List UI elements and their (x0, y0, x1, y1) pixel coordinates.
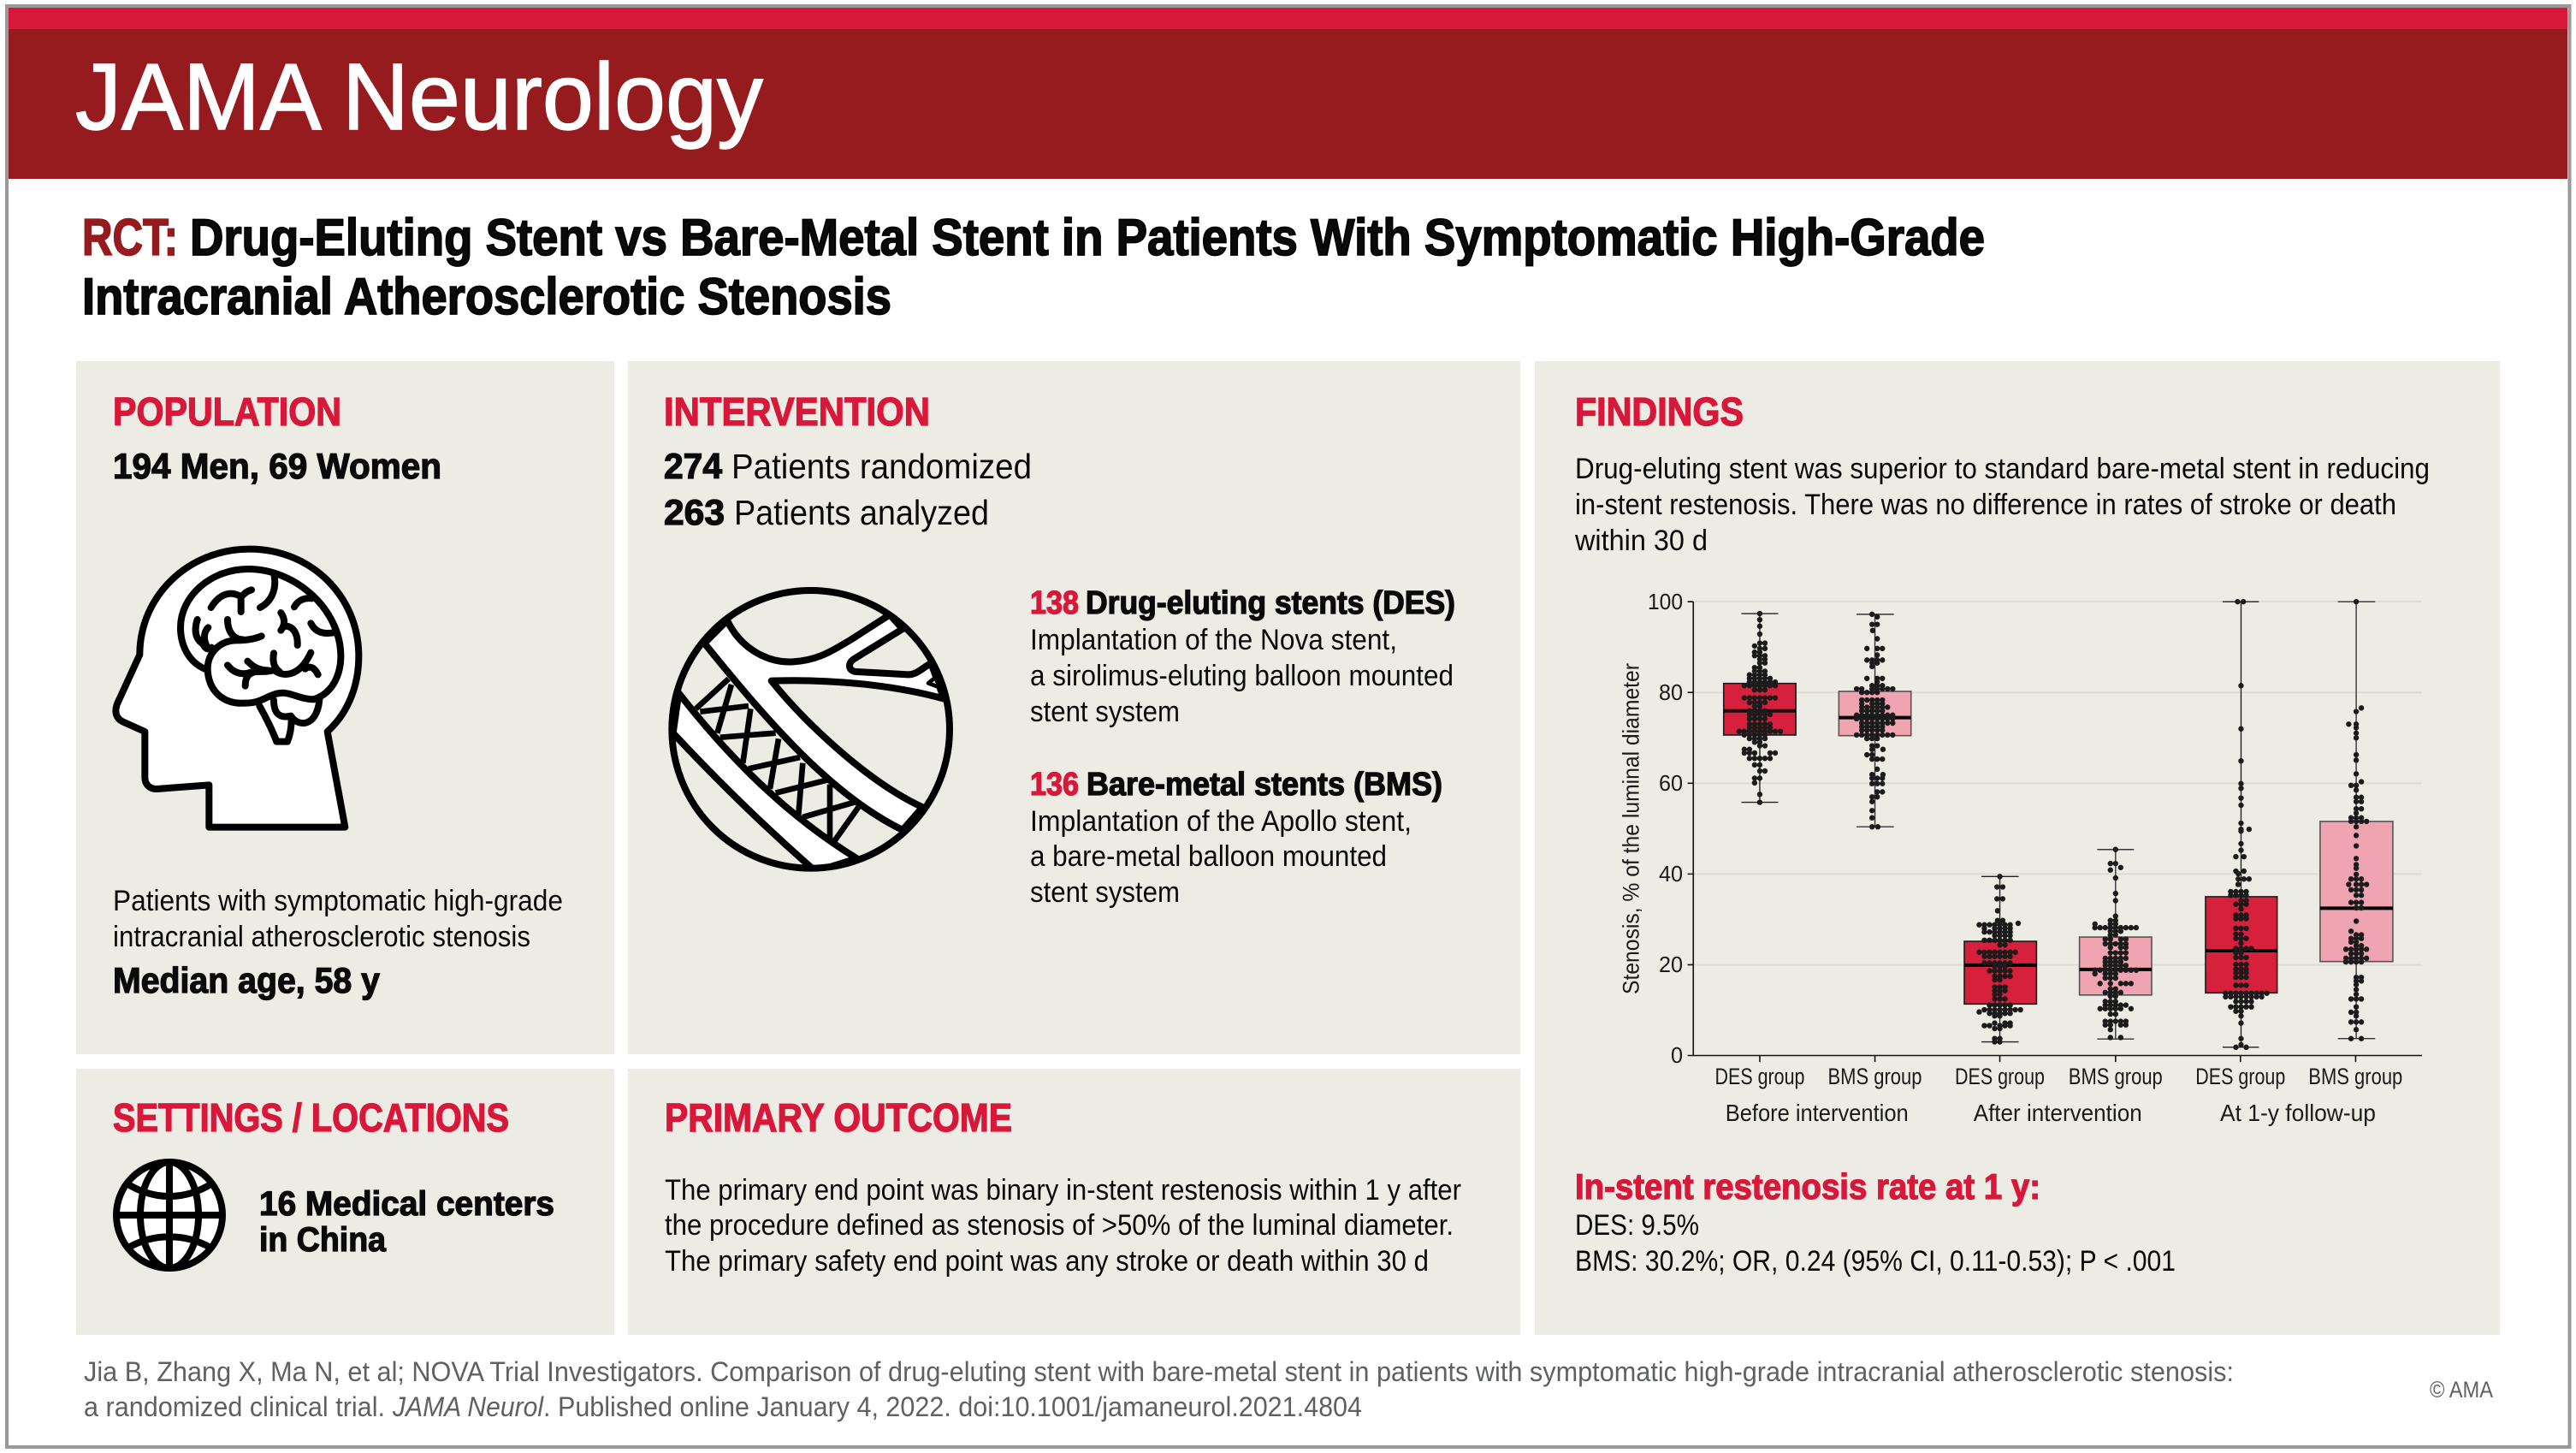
citation: JAMA Neurol (392, 1391, 544, 1422)
DES group 1-year box (2206, 602, 2277, 1047)
DES arm: a sirolimus-eluting balloon mounted (1030, 660, 1454, 692)
findings summary (1574, 453, 2430, 557)
panel: intervention (628, 361, 1520, 1054)
panel: settings and locations (76, 1069, 614, 1335)
y axis labels: 40 (1659, 861, 1683, 887)
citation: a randomized clinical trial. (84, 1391, 385, 1422)
intervention heading: INTERVENTION (664, 389, 930, 434)
findings heading: FINDINGS (1575, 389, 1744, 434)
BMS arm: Bare-metal stents (BMS) (1087, 767, 1442, 803)
y axis labels: 0 (1671, 1042, 1683, 1068)
x axis group labels: BMS group (1827, 1064, 1922, 1089)
restenosis rate heading: In-stent restenosis rate at 1 y: (1575, 1166, 2040, 1207)
BMS group 1-year box (2320, 602, 2393, 1039)
restenosis results: DES: 9.5% (1575, 1209, 1699, 1242)
panel: population (76, 361, 614, 1054)
y axis labels: 60 (1659, 770, 1683, 796)
copyright: © AMA (2430, 1377, 2493, 1403)
patients analyzed: Patients analyzed (734, 493, 989, 532)
patients analyzed: 263 (664, 492, 725, 532)
number of centers (259, 1185, 554, 1259)
x axis group labels: BMS group (2308, 1064, 2402, 1089)
population description (113, 885, 563, 953)
restenosis results: BMS: 30.2%; OR, 0.24 (95% CI, 0.11-0.53); P < .001 (1575, 1245, 2176, 1278)
BMS group after intervention box (2080, 850, 2152, 1039)
citation (84, 1356, 2234, 1422)
number of centers: 16 Medical centers (259, 1185, 554, 1223)
x axis time labels (1726, 1100, 2376, 1126)
BMS arm (1030, 767, 1442, 909)
icon: globe (116, 1162, 222, 1268)
restenosis results (1575, 1209, 2176, 1278)
BMS arm: stent system (1030, 876, 1180, 909)
main title (82, 209, 1985, 325)
icon: head with brain (115, 549, 358, 827)
box plot: stenosis by group and time (1619, 589, 2422, 1126)
plot area (1688, 602, 2422, 1062)
primary outcome text: The primary end point was binary in-stent restenosis within 1 y after (665, 1174, 1461, 1207)
DES arm: Drug-eluting stents (DES) (1086, 585, 1455, 621)
x axis group labels: DES group (2195, 1064, 2285, 1089)
patients randomized: 274 (664, 446, 723, 486)
main title: Drug-Eluting Stent vs Bare-Metal Stent in Patients With Symptomatic High-Grade (190, 209, 1985, 266)
journal title: JAMA Neurology (75, 44, 763, 150)
findings summary: Drug-eluting stent was superior to standard bare-metal stent in reducing (1575, 453, 2430, 485)
x axis group labels: DES group (1955, 1064, 2045, 1089)
settings heading: SETTINGS / LOCATIONS (113, 1095, 509, 1140)
population description: intracranial atherosclerotic stenosis (113, 921, 530, 953)
primary outcome text: the procedure defined as stenosis of >50% of the luminal diameter. (665, 1209, 1454, 1242)
x axis group labels: BMS group (2069, 1064, 2163, 1089)
primary outcome text (665, 1174, 1461, 1278)
DES arm: stent system (1030, 696, 1180, 728)
x axis time labels: After intervention (1974, 1100, 2142, 1126)
data points (1739, 602, 2366, 1047)
DES arm: Implantation of the Nova stent, (1030, 624, 1397, 656)
header band (9, 8, 2567, 179)
citation: . Published online January 4, 2022. doi:10.1001/jamaneurol.2021.4804 (543, 1391, 1362, 1422)
DES group before intervention box (1724, 614, 1796, 803)
BMS arm: 136 (1030, 767, 1079, 803)
x axis time labels: Before intervention (1726, 1100, 1909, 1126)
DES arm (1030, 585, 1455, 728)
number of centers: in China (259, 1221, 387, 1259)
x axis group labels: DES group (1714, 1064, 1805, 1089)
median age: Median age, 58 y (113, 960, 381, 1000)
y axis title: Stenosis, % of the luminal diameter (1619, 663, 1644, 994)
BMS group before intervention box (1839, 614, 1911, 827)
DES arm: 138 (1030, 585, 1079, 621)
BMS arm: Implantation of the Apollo stent, (1030, 805, 1412, 838)
citation: Jia B, Zhang X, Ma N, et al; NOVA Trial Investigators. Comparison of drug-eluting stent with bare-metal stent in patients with symptomatic high-grade intracranial atherosclerotic stenosis: (84, 1356, 2234, 1387)
panel: primary outcome (628, 1069, 1520, 1335)
panel: findings (1535, 361, 2500, 1335)
findings summary: within 30 d (1574, 525, 1708, 557)
BMS arm: a bare-metal balloon mounted (1030, 840, 1387, 873)
x axis group labels (1714, 1064, 2402, 1089)
y axis labels: 80 (1659, 679, 1683, 705)
DES group after intervention box (1964, 876, 2036, 1042)
patients randomized: Patients randomized (731, 447, 1032, 486)
main title: RCT: (82, 209, 178, 266)
x axis time labels: At 1-y follow-up (2220, 1100, 2376, 1126)
y axis labels (1648, 589, 1683, 1068)
primary outcome heading: PRIMARY OUTCOME (665, 1095, 1012, 1140)
primary outcome text: The primary safety end point was any stroke or death within 30 d (665, 1245, 1429, 1278)
findings summary: in-stent restenosis. There was no difference in rates of stroke or death (1575, 489, 2396, 521)
main title: Intracranial Atherosclerotic Stenosis (82, 268, 891, 325)
y axis labels: 20 (1659, 952, 1683, 977)
icon: stent in artery (672, 590, 950, 871)
population description: Patients with symptomatic high-grade (113, 885, 563, 917)
y axis labels: 100 (1648, 589, 1683, 614)
population counts: 194 Men, 69 Women (113, 446, 441, 486)
population heading: POPULATION (113, 389, 341, 434)
